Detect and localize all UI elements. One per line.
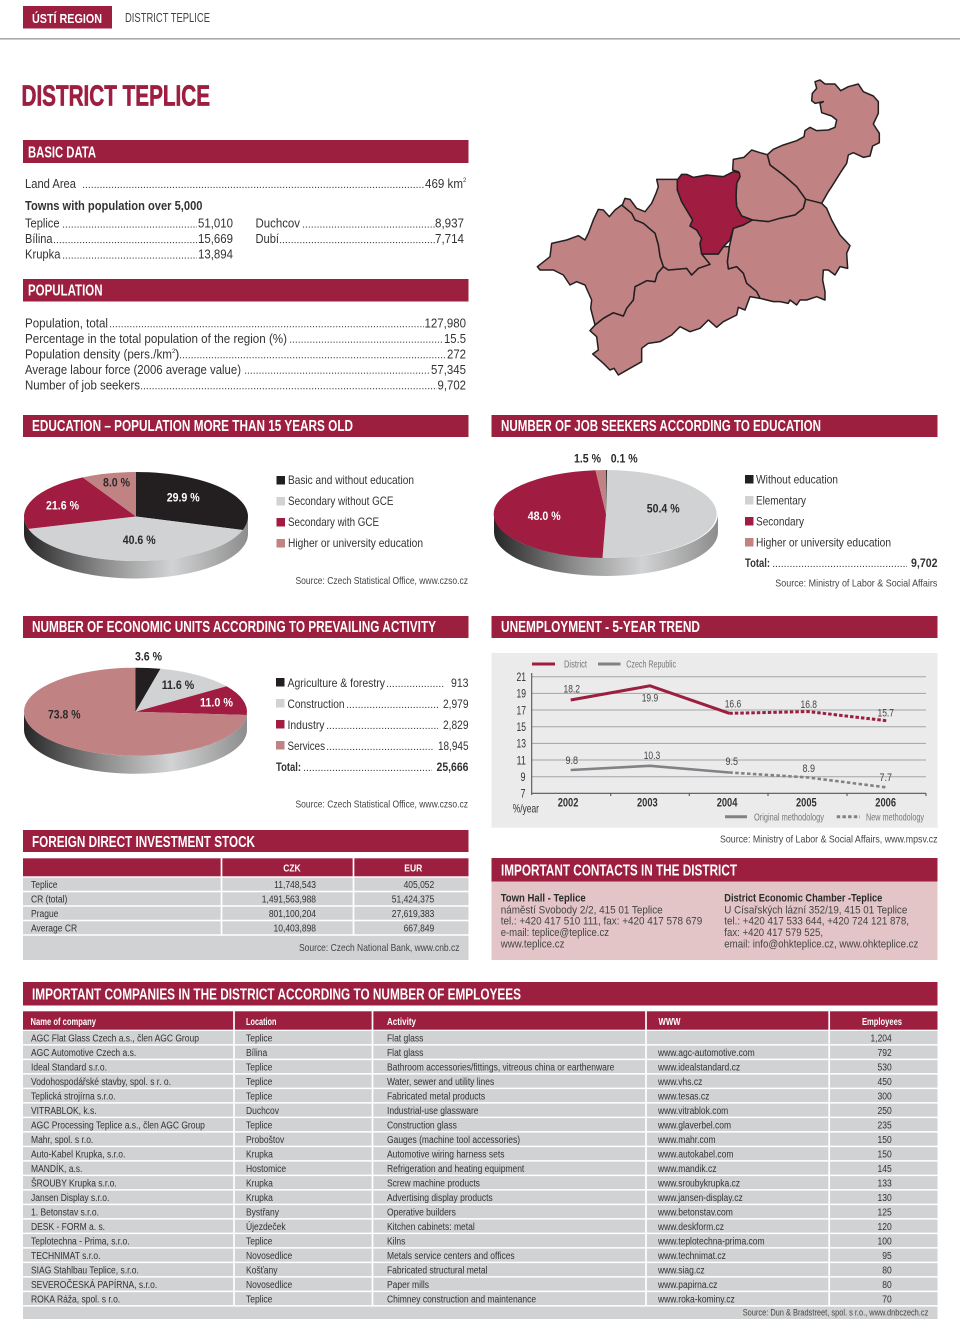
- legend: job seekers: Elementary: [756, 494, 806, 508]
- land area row: 2: [463, 178, 467, 184]
- table rows: www.betonstav.com: [657, 1207, 733, 1217]
- contact: town hall: náměstí Svobody 2/2, 415 01 Teplice: [501, 904, 663, 916]
- table header: Location: [246, 1017, 276, 1028]
- heading: contacts: IMPORTANT CONTACTS IN THE DISTRICT: [501, 862, 737, 879]
- district: south: [590, 247, 760, 375]
- population statistics: Number of job seekers: [25, 377, 140, 392]
- district: Teplice highlighted: [677, 172, 752, 254]
- land area row: 469 km: [425, 176, 463, 191]
- table rows: 70: [882, 1294, 892, 1304]
- table rows: www.papirna.cz: [657, 1279, 718, 1290]
- table rows: 792: [878, 1047, 892, 1058]
- population statistics: 127,980: [424, 315, 466, 330]
- table rows: www.vitrablok.com: [657, 1105, 729, 1116]
- table rows: Metals service centers and offices: [387, 1250, 515, 1261]
- table rows: Automotive wiring harness sets: [387, 1149, 505, 1159]
- table rows: MANDÍK, a.s.: [31, 1163, 82, 1174]
- table rows: Construction glass: [387, 1120, 457, 1130]
- table rows: 100: [878, 1236, 892, 1246]
- y axis labels: [513, 670, 539, 816]
- table rows: 1,204: [870, 1033, 892, 1043]
- table: foreign direct investment: 667,849: [404, 923, 434, 934]
- data labels: 19.9: [642, 692, 658, 704]
- land area row: [25, 176, 467, 191]
- legend: economic units: 2,979: [443, 697, 469, 711]
- table: foreign direct investment: 51,424,375: [392, 894, 434, 905]
- table rows: www.deskform.cz: [657, 1221, 724, 1232]
- legend: education: Secondary with GCE: [288, 515, 379, 529]
- population statistics: Percentage in the total population of the region (%): [25, 331, 287, 346]
- legend: economic units: 913: [451, 676, 469, 690]
- table rows: Krupka: [246, 1192, 274, 1203]
- table rows: www.agc-automotive.com: [657, 1047, 755, 1058]
- table rows: Operative builders: [387, 1207, 456, 1217]
- towns list: 7,714: [435, 231, 464, 246]
- table header: [30, 1017, 902, 1028]
- contact: economic chamber: U Císařských lázní 352/19, 415 01 Teplice: [724, 904, 907, 916]
- table rows: Košťany: [246, 1265, 278, 1275]
- table rows: Refrigeration and heating equipment: [387, 1163, 525, 1174]
- towns list: [25, 216, 464, 262]
- table rows: Novosedlice: [246, 1279, 292, 1290]
- table rows: Fabricated metal products: [387, 1091, 485, 1101]
- table rows: Jansen Display s.r.o.: [31, 1192, 109, 1203]
- x axis labels: 2006: [875, 795, 896, 809]
- x axis labels: 2003: [637, 795, 658, 809]
- table rows: ROKA Ráža, spol. s r.o.: [31, 1294, 120, 1304]
- towns list: 8,937: [435, 216, 464, 231]
- contact: town hall: [500, 893, 702, 950]
- table rows: Hostomice: [246, 1163, 286, 1174]
- data labels: 9.8: [566, 755, 578, 767]
- table rows: Chimney construction and maintenance: [387, 1294, 536, 1304]
- table rows: www.mandik.cz: [657, 1163, 717, 1174]
- data labels: 8.9: [802, 763, 815, 775]
- y axis labels: %/year: [513, 802, 539, 816]
- pie chart: education: [24, 472, 248, 578]
- heading: economic units: [23, 616, 468, 638]
- pie chart: job seekers: 50.4 %: [647, 501, 680, 515]
- district: upper middle: [733, 150, 806, 222]
- towns list: Teplice: [25, 216, 60, 231]
- table: foreign direct investment: Source: Czech National Bank, www.cnb.cz: [299, 942, 460, 954]
- header: breadcrumb: [0, 6, 960, 40]
- pie chart: job seekers: 0.1 %: [611, 452, 638, 466]
- y axis labels: 17: [516, 703, 526, 717]
- y axis labels: 21: [516, 670, 526, 684]
- y axis labels: 11: [516, 753, 526, 767]
- table rows: www.roka-kominy.cz: [657, 1294, 735, 1304]
- table rows: Kitchen cabinets: metal: [387, 1221, 475, 1232]
- table: foreign direct investment: Teplice: [31, 879, 57, 890]
- x axis labels: 2004: [717, 795, 738, 809]
- table rows: 250: [878, 1105, 892, 1116]
- table: important companies: [23, 1011, 938, 1319]
- legend: education: Higher or university education: [288, 536, 423, 550]
- legend: series: District: [564, 659, 587, 671]
- table rows: www.idealstandard.cz: [657, 1062, 740, 1072]
- table rows: Újezdeček: [246, 1221, 286, 1232]
- x axis labels: 2002: [558, 795, 579, 809]
- legend: education: Secondary without GCE: [288, 494, 394, 508]
- data labels: 16.6: [725, 698, 741, 710]
- data labels: 10.3: [644, 750, 660, 762]
- pie chart: education: 21.6 %: [46, 498, 79, 512]
- series: district: [571, 686, 887, 721]
- table rows: Flat glass: [387, 1033, 424, 1043]
- source: economic units: Source: Czech Statistical Office, www.czso.cz: [296, 798, 468, 810]
- table rows: Ideal Standard s.r.o.: [31, 1062, 107, 1072]
- legend: economic units: Industry: [288, 718, 324, 732]
- table rows: [31, 1033, 892, 1304]
- y axis labels: 9: [520, 770, 526, 784]
- legend: economic units: 2,829: [443, 718, 469, 732]
- table rows: Gauges (machine tool accessories): [387, 1134, 520, 1145]
- table rows: Fabricated structural metal: [387, 1265, 487, 1275]
- table rows: Teplice: [246, 1033, 272, 1043]
- table rows: Proboštov: [246, 1134, 285, 1145]
- population statistics: 57,345: [431, 362, 466, 377]
- heading: education: EDUCATION – POPULATION MORE THAN 15 YEARS OLD: [32, 418, 353, 435]
- heading: unemployment: UNEMPLOYMENT - 5-YEAR TREND: [501, 619, 700, 636]
- table: foreign direct investment: CR (total): [31, 894, 67, 905]
- table rows: Krupka: [246, 1149, 274, 1159]
- table rows: 130: [878, 1192, 892, 1203]
- y axis labels: 15: [516, 720, 526, 734]
- table rows: AGC Processing Teplice a.s., člen AGC Group: [31, 1120, 205, 1130]
- data labels: 16.8: [800, 699, 817, 711]
- table rows: ŠROUBY Krupka s.r.o.: [31, 1178, 117, 1188]
- table rows: 150: [878, 1149, 892, 1159]
- table rows: 150: [878, 1134, 892, 1145]
- y axis labels: 13: [516, 737, 526, 751]
- table rows: Advertising display products: [387, 1192, 493, 1203]
- table header: Activity: [387, 1017, 416, 1028]
- legend: education: [276, 473, 423, 550]
- legend: economic units: Construction: [288, 697, 344, 711]
- table rows: Teplice: [246, 1294, 272, 1304]
- table rows: 300: [878, 1091, 892, 1101]
- table header: Name of company: [30, 1017, 96, 1028]
- legend: series: [532, 659, 676, 671]
- legend: job seekers: [745, 472, 938, 570]
- table rows: 235: [878, 1120, 892, 1130]
- table rows: www.sroubykrupka.cz: [657, 1178, 740, 1188]
- towns list: 51,010: [198, 216, 233, 231]
- legend: job seekers: Higher or university education: [756, 536, 891, 550]
- table rows: Teplice: [246, 1076, 272, 1087]
- legend: economic units: Total:: [276, 760, 301, 774]
- table: foreign direct investment: 11,748,543: [274, 879, 316, 890]
- data labels: 15.7: [878, 708, 894, 720]
- table rows: 450: [878, 1076, 892, 1087]
- table rows: Paper mills: [387, 1279, 429, 1290]
- pie chart: economic units: [24, 650, 247, 774]
- table rows: www.tesas.cz: [657, 1091, 710, 1101]
- towns list: Bílina: [25, 231, 53, 246]
- table rows: www.technimat.cz: [657, 1250, 726, 1261]
- table rows: www.autokabel.com: [657, 1149, 734, 1159]
- table rows: Screw machine products: [387, 1178, 480, 1188]
- legend: job seekers: Without education: [756, 472, 838, 486]
- table: foreign direct investment: [23, 858, 468, 960]
- table: foreign direct investment: 1,491,563,988: [262, 894, 316, 905]
- x axis labels: 2005: [796, 795, 817, 809]
- contact: economic chamber: fax: +420 417 579 525,: [724, 927, 823, 939]
- table rows: 120: [878, 1221, 892, 1232]
- pie chart: economic units: 11.6 %: [162, 678, 194, 692]
- pie chart: education: 40.6 %: [123, 533, 156, 547]
- towns list: 13,894: [198, 247, 233, 262]
- pie chart: education: 29.9 %: [167, 490, 200, 504]
- series: Czech Republic: [571, 766, 887, 788]
- population statistics: ): [175, 346, 179, 361]
- towns list: Duchcov: [256, 216, 300, 231]
- table rows: 95: [882, 1250, 892, 1261]
- table: foreign direct investment: 10,403,898: [274, 923, 316, 934]
- table rows: Kilns: [387, 1236, 406, 1246]
- table rows: 145: [878, 1163, 892, 1174]
- heading: job seekers: NUMBER OF JOB SEEKERS ACCORDING TO EDUCATION: [501, 418, 821, 435]
- heading: unemployment: [492, 616, 938, 638]
- contact: town hall: Town Hall - Teplice: [501, 893, 586, 905]
- title: DISTRICT TEPLICE: [22, 80, 210, 112]
- district: east: [727, 199, 850, 305]
- table rows: 530: [878, 1062, 892, 1072]
- header: breadcrumb: ÚSTÍ REGION: [32, 11, 102, 26]
- table: foreign direct investment: 405,052: [404, 879, 434, 890]
- district: north-east: [767, 80, 879, 203]
- heading: basic data: BASIC DATA: [28, 144, 96, 161]
- table rows: Bystřany: [246, 1207, 279, 1217]
- towns list: Dubí: [256, 231, 279, 246]
- legend: job seekers: Total:: [745, 556, 770, 570]
- contact: economic chamber: District Economic Chamber -Teplice: [724, 893, 882, 905]
- legend: economic units: Services: [288, 739, 325, 753]
- table rows: 1. Betonstav s.r.o.: [31, 1207, 99, 1217]
- heading: foreign direct investment: [23, 830, 468, 852]
- table rows: Teplice: [246, 1062, 272, 1072]
- legend: economic units: [276, 676, 469, 774]
- table rows: Teplice: [246, 1091, 272, 1101]
- table: foreign direct investment: Prague: [31, 908, 58, 919]
- table rows: Duchcov: [246, 1105, 279, 1116]
- table rows: www.glaverbel.com: [657, 1120, 731, 1130]
- table rows: Flat glass: [387, 1047, 424, 1058]
- heading: important companies: [23, 982, 938, 1006]
- land area row: Land Area: [25, 176, 77, 191]
- table rows: Teplická strojírna s.r.o.: [31, 1091, 115, 1101]
- panel: population: [23, 279, 468, 392]
- table: foreign direct investment: Average CR: [31, 923, 77, 934]
- contact: economic chamber: email: info@ohkteplice.cz, www.ohkteplice.cz: [724, 938, 918, 950]
- population statistics: 9,702: [438, 377, 466, 392]
- y axis labels: 7: [520, 787, 526, 801]
- table rows: Teplice: [246, 1120, 272, 1130]
- data labels: 18.2: [564, 684, 580, 696]
- table header: WWW: [658, 1017, 681, 1028]
- legend: methodology: [725, 812, 925, 824]
- pie chart: job seekers: 1.5 %: [574, 452, 601, 466]
- population statistics: 272: [447, 346, 466, 361]
- population statistics: 15.5: [444, 331, 466, 346]
- heading: contacts: [492, 858, 938, 882]
- heading: economic units: NUMBER OF ECONOMIC UNITS ACCORDING TO PREVAILING ACTIVITY: [32, 619, 436, 636]
- population statistics: Average labour force (2006 average value): [25, 362, 241, 377]
- heading: important companies: IMPORTANT COMPANIES IN THE DISTRICT ACCORDING TO NUMBER OF EMPLOYEES: [32, 986, 521, 1004]
- source: job seekers: Source: Ministry of Labor & Social Affairs: [775, 578, 937, 590]
- legend: economic units: 18,945: [438, 739, 469, 753]
- towns subheading: Towns with population over 5,000: [25, 198, 202, 213]
- table rows: VITRABLOK, k.s.: [31, 1105, 97, 1116]
- population statistics: 2: [172, 349, 176, 355]
- district: west-centre: [622, 179, 710, 275]
- pie chart: education: 8.0 %: [103, 476, 130, 490]
- table: foreign direct investment: 801,100,204: [269, 908, 316, 919]
- table: foreign direct investment: EUR: [404, 863, 423, 873]
- pie chart: economic units: 3.6 %: [135, 650, 162, 664]
- legend: economic units: Agriculture & forestry: [288, 676, 385, 690]
- data labels: 9.5: [726, 756, 738, 768]
- table rows: www.mahr.com: [657, 1134, 716, 1145]
- panel: important contacts: [492, 858, 938, 960]
- pie chart: economic units: 11.0 %: [200, 696, 233, 710]
- table rows: 125: [878, 1207, 892, 1217]
- contact: economic chamber: [724, 893, 918, 950]
- legend: methodology: Original methodology: [754, 812, 825, 824]
- table rows: SIAG Stahlbau Teplice, s.r.o.: [31, 1265, 139, 1275]
- heading: foreign direct investment: FOREIGN DIRECT INVESTMENT STOCK: [32, 834, 255, 851]
- table rows: Krupka: [246, 1178, 274, 1188]
- source: education: Source: Czech Statistical Office, www.czso.cz: [296, 575, 468, 587]
- line chart: unemployment: [492, 653, 938, 828]
- table rows: 133: [878, 1178, 892, 1188]
- table rows: www.vhs.cz: [657, 1076, 703, 1087]
- x axis labels: [558, 795, 896, 809]
- pie chart: job seekers: [494, 452, 718, 576]
- population statistics: Population, total: [25, 315, 108, 330]
- pie chart: job seekers: 48.0 %: [528, 509, 561, 523]
- y axis labels: 19: [516, 687, 526, 701]
- legend: methodology: New methodology: [866, 812, 925, 824]
- legend: series: Czech Republic: [626, 659, 676, 671]
- table rows: TECHNIMAT s.r.o.: [31, 1250, 101, 1261]
- district: west: [537, 205, 663, 325]
- table rows: Mahr, spol. s r.o.: [31, 1134, 93, 1145]
- data labels: [564, 684, 894, 784]
- table rows: www.siag.cz: [657, 1265, 705, 1275]
- table rows: 80: [882, 1265, 892, 1275]
- table rows: Bílina: [246, 1047, 268, 1058]
- heading: population: [23, 279, 468, 302]
- table rows: Auto-Kabel Krupka, s.r.o.: [31, 1149, 125, 1159]
- population statistics: Population density (pers./km: [25, 346, 172, 361]
- table rows: AGC Flat Glass Czech a.s., člen AGC Group: [31, 1033, 199, 1043]
- table rows: Vodohospodářské stavby, spol. s r. o.: [31, 1076, 171, 1087]
- table rows: Teplotechna - Prima, s.r.o.: [31, 1236, 130, 1246]
- header: breadcrumb: DISTRICT TEPLICE: [125, 11, 210, 25]
- table: foreign direct investment: CZK: [283, 863, 301, 873]
- table rows: Water, sewer and utility lines: [387, 1076, 495, 1087]
- contact: economic chamber: tel.: +420 417 533 644, +420 724 121 878,: [724, 916, 909, 928]
- legend: job seekers: 9,702: [911, 556, 938, 570]
- table rows: Industrial-use glassware: [387, 1105, 479, 1116]
- contact: town hall: tel.: +420 417 510 111, fax: +420 417 578 679: [501, 916, 702, 928]
- table rows: Bathroom accessories/fittings, vitreous china or earthenware: [387, 1062, 614, 1072]
- map: Ústí region districts: [537, 80, 879, 375]
- table rows: www.teplotechna-prima.com: [657, 1236, 765, 1246]
- legend: job seekers: Secondary: [756, 514, 804, 528]
- heading: population: POPULATION: [28, 283, 102, 300]
- data labels: 7.7: [880, 772, 892, 784]
- contact: town hall: www.teplice.cz: [500, 938, 564, 950]
- pie chart: economic units: 73.8 %: [48, 707, 81, 721]
- panel: basic data: [23, 140, 468, 262]
- table rows: DESK - FORM a. s.: [31, 1221, 105, 1232]
- legend: education: Basic and without education: [288, 473, 414, 487]
- contact: town hall: e-mail: teplice@teplice.cz: [501, 927, 609, 939]
- table rows: AGC Automotive Czech a.s.: [31, 1047, 136, 1058]
- table rows: 80: [882, 1279, 892, 1290]
- heading: basic data: [23, 140, 468, 163]
- table rows: Teplice: [246, 1236, 272, 1246]
- legend: economic units: 25,666: [436, 760, 469, 774]
- towns list: 15,669: [198, 231, 233, 246]
- table rows: Novosedlice: [246, 1250, 292, 1261]
- towns list: Krupka: [25, 247, 61, 262]
- population statistics: [25, 315, 466, 392]
- table header: Employees: [862, 1017, 902, 1028]
- table rows: www.jansen-display.cz: [657, 1192, 743, 1203]
- table: foreign direct investment: 27,619,383: [392, 908, 434, 919]
- table rows: SEVEROČESKÁ PAPÍRNA, s.r.o.: [31, 1279, 157, 1290]
